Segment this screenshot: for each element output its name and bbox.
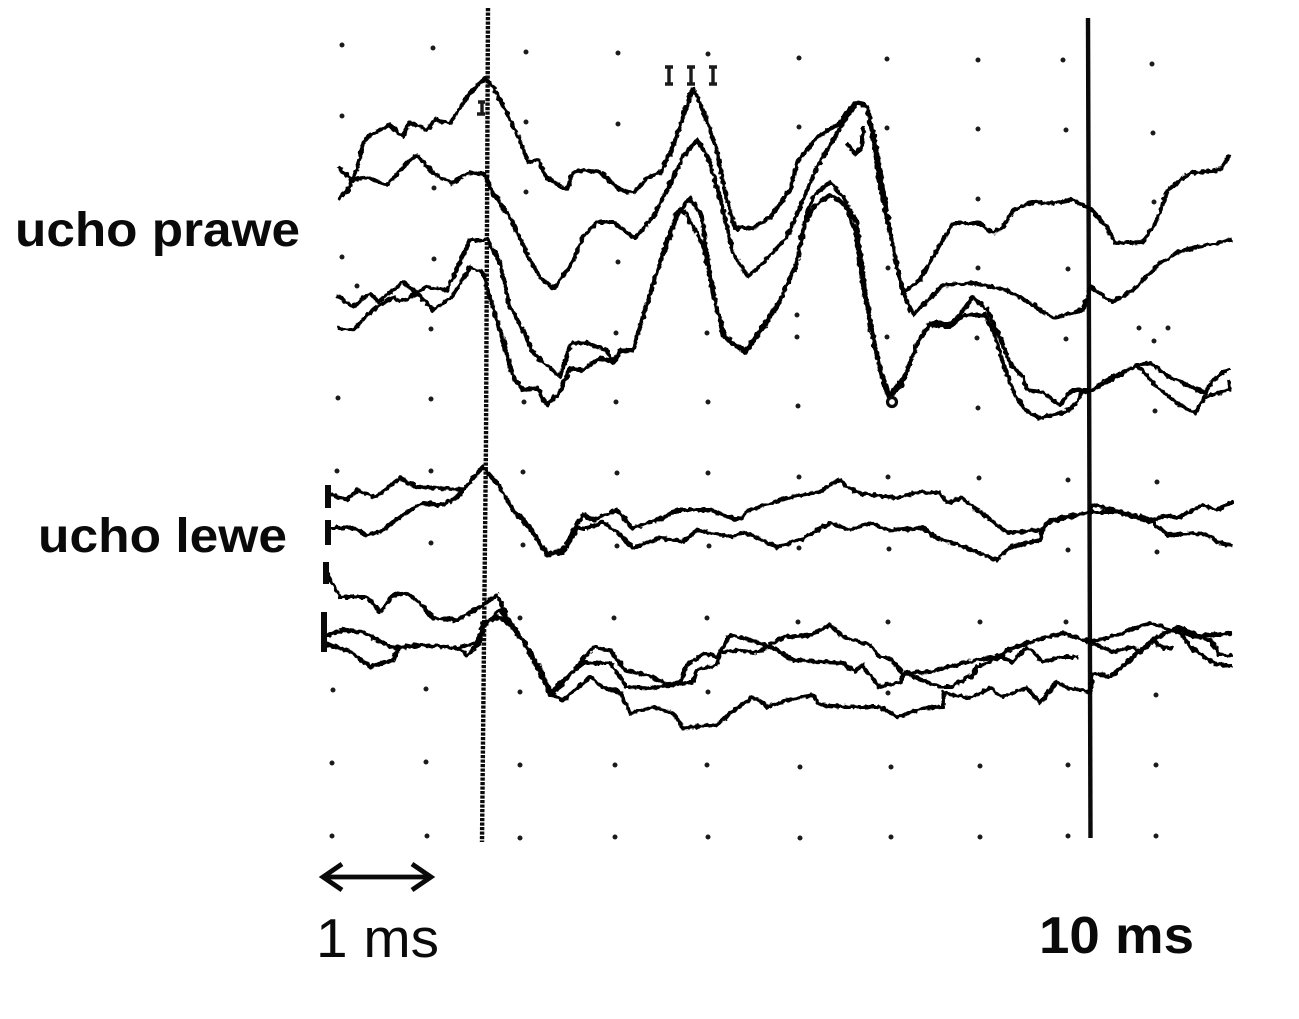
label: ucho lewe: ucho lewe: [38, 510, 287, 563]
label: 1 ms: 1 ms: [316, 907, 439, 969]
trace start bars: [324, 485, 328, 652]
solid 10 ms marker line: [1088, 18, 1090, 838]
arrow: 1 ms scale: [323, 864, 431, 890]
trace loop near peak: [888, 398, 896, 406]
traces: ucho lewe: [323, 467, 1233, 728]
peak markers: [477, 67, 717, 114]
label: ucho prawe: ucho prawe: [15, 204, 300, 257]
dotted marker line: [482, 8, 488, 842]
label: 10 ms: 10 ms: [1039, 907, 1194, 965]
grid dots: [332, 45, 1168, 838]
traces: ucho prawe: [337, 78, 1232, 418]
